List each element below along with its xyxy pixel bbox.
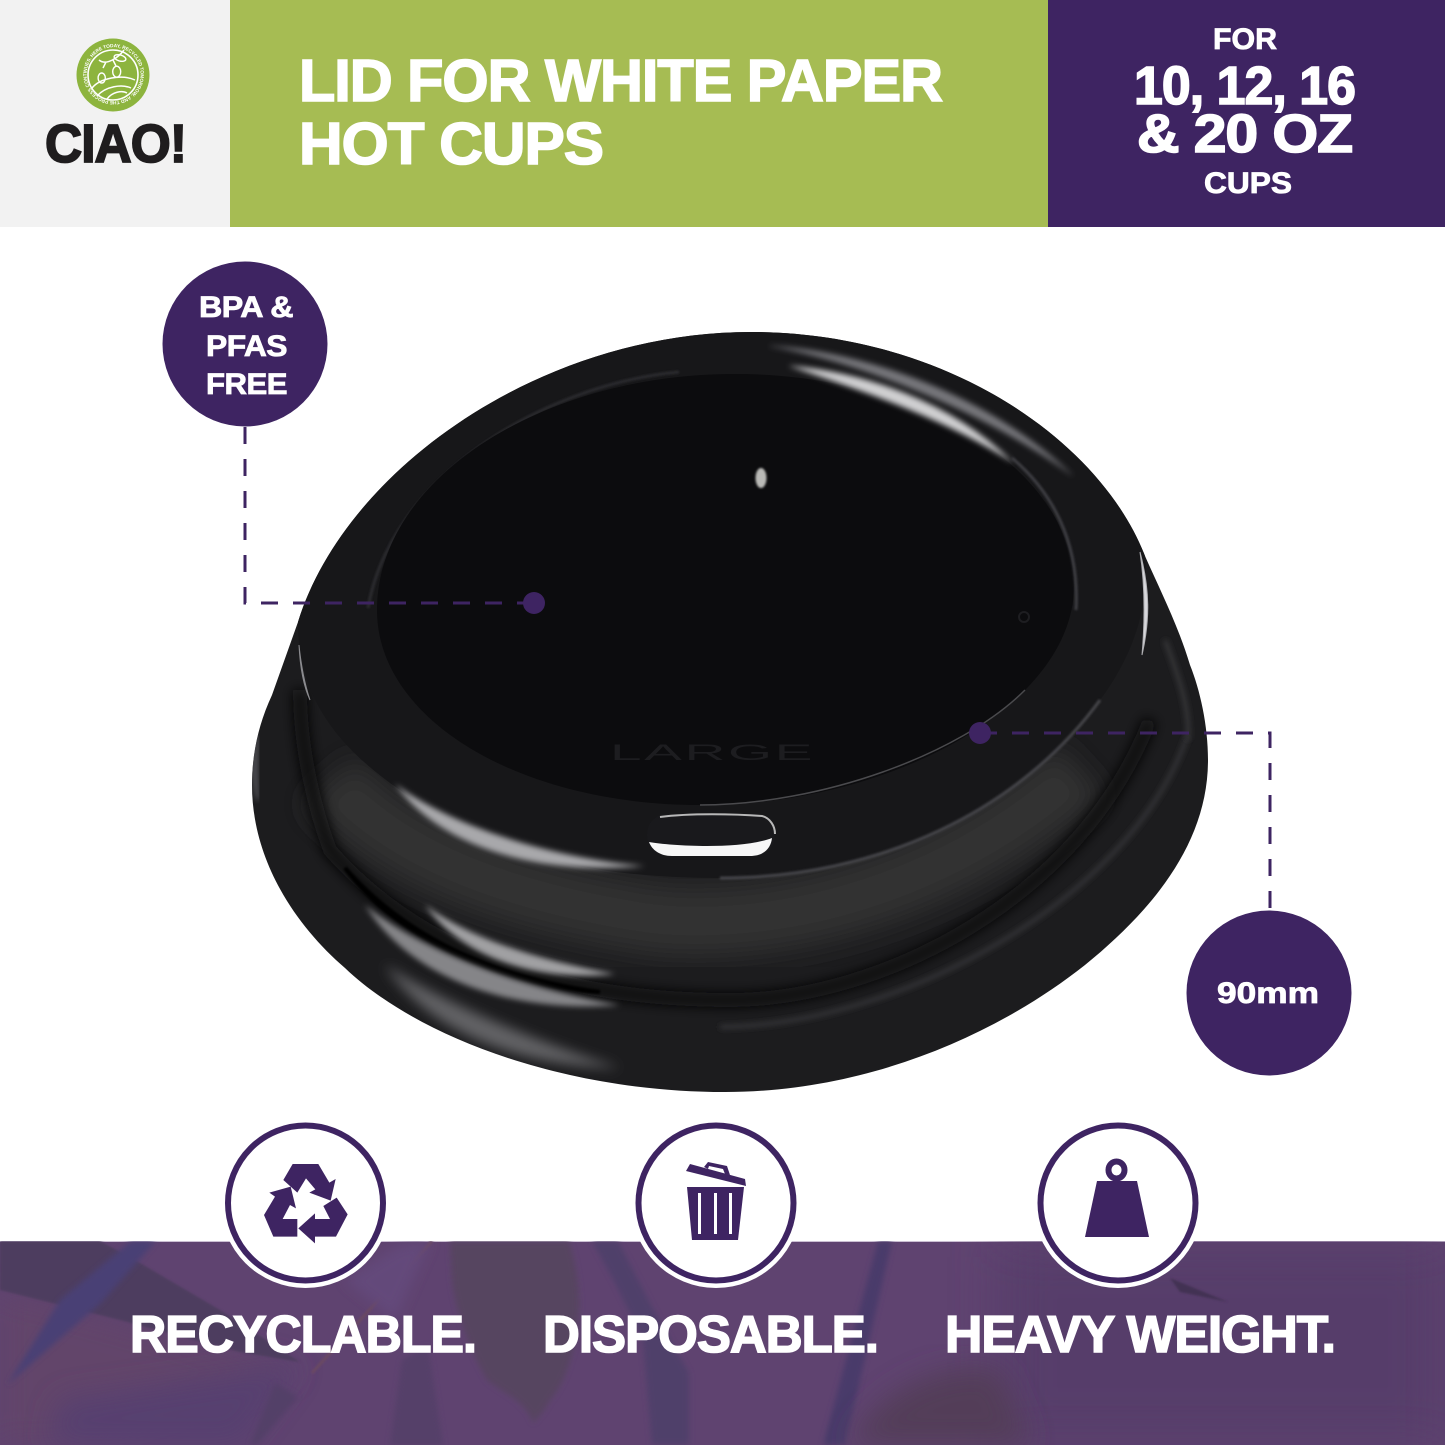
- logo wordmark: CIAO!: [45, 114, 186, 174]
- icon: round green recycling badge: HERE TODAY, RECYCLED TOMORROW. AND THE PROCESS CONTINUES.: [83, 44, 144, 104]
- icon badge ring: [631, 1118, 801, 1288]
- icon badge ring: [1033, 1118, 1203, 1288]
- dome top rim highlights: [368, 372, 679, 608]
- size label: 10, 12, 16: [1134, 56, 1355, 116]
- leader dot: [523, 592, 545, 614]
- feature: disposable: [543, 1118, 878, 1364]
- drink opening: [647, 814, 775, 856]
- lid raised dome: [298, 332, 1146, 878]
- callout: 90mm diameter: [969, 722, 1352, 1076]
- title: LID FOR WHITE PAPER: [299, 48, 942, 114]
- title: HOT CUPS: [299, 111, 603, 177]
- lid flange shading: [254, 640, 1188, 1068]
- size label: FOR: [1213, 23, 1277, 56]
- badge circle: [1186, 910, 1352, 1076]
- icon: recycling arrows: [264, 1164, 348, 1243]
- callout: BPA & PFAS free: [162, 262, 545, 614]
- header: title panel: [230, 0, 1048, 227]
- badge text: BPA &: [199, 291, 293, 324]
- badge circle: [162, 262, 328, 426]
- bright rim edge: [1140, 552, 1148, 655]
- icon badge ring: [220, 1118, 390, 1288]
- dashed leader line: [245, 427, 534, 603]
- embossed dimple: [1019, 612, 1029, 622]
- lid flange silhouette: [252, 332, 1208, 1092]
- dome front shine: [395, 784, 645, 868]
- lid recessed top: [377, 374, 1074, 805]
- badge text: PFAS: [206, 330, 287, 363]
- label: DISPOSABLE.: [543, 1306, 878, 1364]
- icon: weight: [1085, 1162, 1149, 1237]
- badge text: 90mm: [1217, 977, 1319, 1010]
- size label: & 20 OZ: [1137, 104, 1352, 164]
- header: cup sizes panel: [1048, 0, 1445, 227]
- leader dot: [969, 722, 991, 744]
- label: RECYCLABLE.: [130, 1306, 476, 1364]
- feature: recyclable: [130, 1118, 476, 1364]
- product photo: black lid: [252, 332, 1208, 1092]
- embossed lid text: LARGE: [610, 740, 815, 765]
- icon: round green recycling badge: [76, 38, 150, 112]
- size label: CUPS: [1204, 167, 1292, 200]
- icon: trash can: [686, 1162, 746, 1240]
- flange highlights: [425, 905, 615, 976]
- recess edge highlights: [790, 366, 1012, 462]
- label: HEAVY WEIGHT.: [945, 1306, 1335, 1364]
- dashed leader line: [980, 733, 1270, 911]
- badge text: FREE: [206, 368, 287, 401]
- header: logo panel: [0, 0, 230, 227]
- feature: heavy weight: [945, 1118, 1335, 1364]
- sip hole: [756, 468, 766, 488]
- bottom purple banner with blurred leaves: [0, 1241, 1445, 1445]
